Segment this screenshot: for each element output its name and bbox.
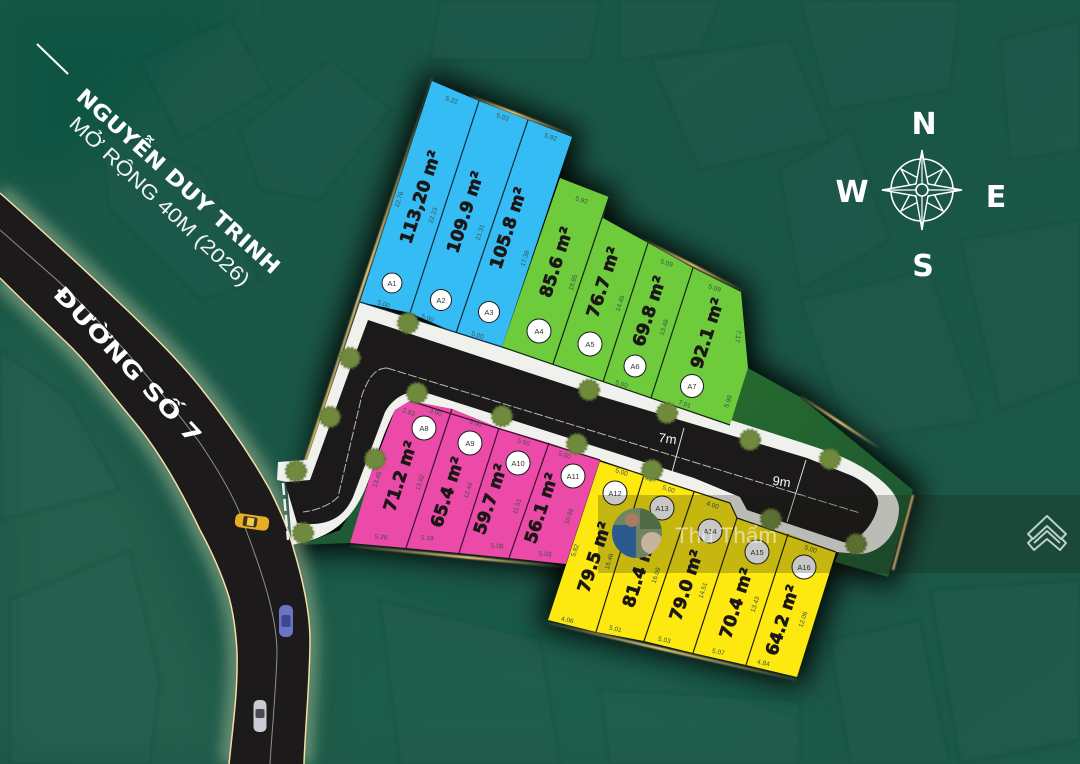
gold glow along plot edges: [305, 78, 913, 680]
green plots A4-A7: A7: [687, 382, 697, 391]
green plots A4-A7: A4: [534, 327, 544, 336]
green plots A4-A7: A5: [585, 340, 595, 349]
yellow plots A12-A16: 5.00: [661, 484, 676, 495]
yellow plots A12-A16: [548, 461, 836, 677]
yellow plots A12-A16: 5.00: [614, 467, 629, 478]
pink plots A8-A11: 2.83: [401, 407, 416, 418]
yellow plots A12-A16: 5.03: [657, 636, 672, 645]
pink plots A8-A11: 3.00: [428, 407, 443, 418]
yellow plots A12-A16: 12.06: [798, 610, 810, 628]
yellow plots A12-A16: 64.2 m²: [762, 582, 804, 658]
pink plots A8-A11: [350, 401, 600, 564]
pink plots A8-A11: A11: [567, 472, 579, 481]
watermark name: Thu Thẩm: [675, 523, 777, 548]
yellow plots A12-A16: 5.07: [711, 648, 726, 657]
pink plots A8-A11: 65.4 m²: [427, 454, 469, 530]
blue plots A1-A3: 5.22: [444, 95, 459, 106]
pink plots A8-A11: 13.82: [415, 473, 427, 491]
green plots A4-A7: 5.09: [707, 283, 722, 294]
pink plots A8-A11: 5.19: [421, 534, 434, 543]
yellow plots A12-A16: 14.51: [698, 581, 710, 599]
road width label 7m: 7m: [658, 430, 678, 447]
watermark logo: [1028, 516, 1066, 550]
yellow plots A12-A16: A15: [750, 548, 764, 557]
yellow plots A12-A16: 79.0 m²: [666, 547, 708, 623]
road width label 9m: 9m: [772, 473, 792, 490]
green plots A4-A7: 69.8 m²: [629, 273, 671, 349]
yellow plots A12-A16: 5.00: [803, 544, 818, 555]
cars on main road: [234, 513, 293, 732]
road label: Đường Số 7: ĐƯỜNG SỐ 7: [48, 279, 209, 449]
watermark avatar: [611, 507, 663, 559]
blue plots A1-A3: 22.76: [394, 190, 406, 208]
green plots A4-A7: 85.6 m²: [536, 224, 578, 300]
green plots A4-A7: [502, 178, 748, 425]
blue plots A1-A3: 5.00: [470, 330, 485, 341]
compass rose: [835, 107, 1006, 284]
watermark band: [598, 495, 1080, 573]
pink plots A8-A11: 5.26: [375, 533, 388, 542]
pink plots A8-A11: 5.00: [557, 450, 572, 461]
pink plots A8-A11: 5.03: [539, 550, 552, 559]
green plots A4-A7: 5.98: [723, 394, 734, 409]
yellow plots A12-A16: 5.82: [570, 543, 581, 558]
pink plots A8-A11: 5.08: [491, 542, 504, 551]
yellow plots A12-A16: A13: [655, 504, 669, 513]
green plots A4-A7: 7.91: [677, 399, 692, 410]
blue plots A1-A3: 5.92: [543, 132, 558, 143]
compass rose: S: [912, 249, 934, 284]
road label: Nguyễn Duy Trinh: [37, 44, 287, 291]
yellow plots A12-A16: 16.46: [604, 552, 616, 570]
green buffer patches: [300, 368, 913, 577]
pink plots A8-A11: 5.00: [468, 418, 483, 429]
main road: Đường Số 7: [0, 193, 310, 764]
yellow plots A12-A16: 13.43: [750, 595, 762, 613]
pink plots A8-A11: 11.51: [512, 498, 523, 515]
road label: Nguyễn Duy Trinh: MỞ RỘNG 40M (2026): [65, 111, 255, 291]
blue plots A1-A3: 5.00: [420, 313, 435, 324]
blue plots A1-A3: 5.03: [495, 112, 510, 123]
blue plots A1-A3: A1: [387, 279, 397, 288]
yellow plots A12-A16: A16: [797, 563, 811, 572]
yellow plots A12-A16: 70.4 m²: [716, 565, 758, 641]
trees along internal road: [286, 313, 866, 554]
green plots A4-A7: 5.09: [659, 258, 674, 269]
blue plots A1-A3: A3: [484, 308, 494, 317]
compass rose: E: [986, 180, 1006, 215]
road label: Nguyễn Duy Trinh: NGUYỄN DUY TRINH: [72, 81, 287, 279]
green plots A4-A7: 5.92: [574, 195, 589, 206]
blue plots A1-A3: 17.38: [520, 249, 532, 267]
yellow plots A12-A16: 5.01: [608, 625, 623, 634]
blue plots A1-A3: [360, 81, 572, 347]
green plots A4-A7: 92.1 m²: [687, 295, 729, 371]
pink plots A8-A11: 71.2 m²: [380, 438, 422, 514]
pink plots A8-A11: 5.00: [516, 437, 531, 448]
pink plots A8-A11: A8: [419, 424, 429, 433]
green plots A4-A7: 5.00: [614, 379, 629, 390]
green plots A4-A7: 16.85: [568, 273, 580, 291]
blue plots A1-A3: A2: [436, 296, 446, 305]
green plots A4-A7: A6: [630, 362, 640, 371]
yellow plots A12-A16: 81.4 m²: [619, 534, 661, 610]
compass rose: N: [911, 107, 937, 142]
pink plots A8-A11: 10.99: [564, 507, 576, 525]
pink plots A8-A11: A10: [511, 459, 525, 468]
yellow plots A12-A16: A12: [608, 489, 622, 498]
blue plots A1-A3: 5.00: [376, 299, 391, 310]
compass rose: W: [835, 175, 869, 210]
green plots A4-A7: 14.45: [615, 294, 627, 312]
yellow plots A12-A16: 4.84: [756, 659, 771, 668]
dark shadow around the plot: [300, 81, 913, 677]
blue plots A1-A3: 21.31: [475, 223, 487, 241]
blue plots A1-A3: 22.23: [428, 206, 440, 224]
pink plots A8-A11: A9: [465, 439, 475, 448]
pink plots A8-A11: 56.1 m²: [521, 470, 563, 546]
green plots A4-A7: 7.17: [733, 329, 742, 343]
yellow plots A12-A16: 16.09: [651, 566, 663, 584]
internal road with curb: [277, 302, 899, 554]
green plots A4-A7: 13.49: [659, 318, 671, 336]
pink plots A8-A11: 13.45: [372, 470, 384, 488]
yellow plots A12-A16: A14: [703, 527, 717, 536]
blue plots A1-A3: 113,20 m²: [397, 148, 445, 246]
pink plots A8-A11: 12.44: [463, 481, 475, 499]
blue plots A1-A3: 105.8 m²: [486, 185, 532, 272]
yellow plots A12-A16: 4.06: [560, 616, 575, 625]
green plots A4-A7: 76.7 m²: [583, 244, 625, 320]
yellow plots A12-A16: 79.5 m²: [574, 519, 616, 595]
pink plots A8-A11: 59.7 m²: [470, 461, 512, 537]
yellow plots A12-A16: 4.00: [705, 500, 720, 511]
blue plots A1-A3: 109.9 m²: [443, 169, 489, 256]
